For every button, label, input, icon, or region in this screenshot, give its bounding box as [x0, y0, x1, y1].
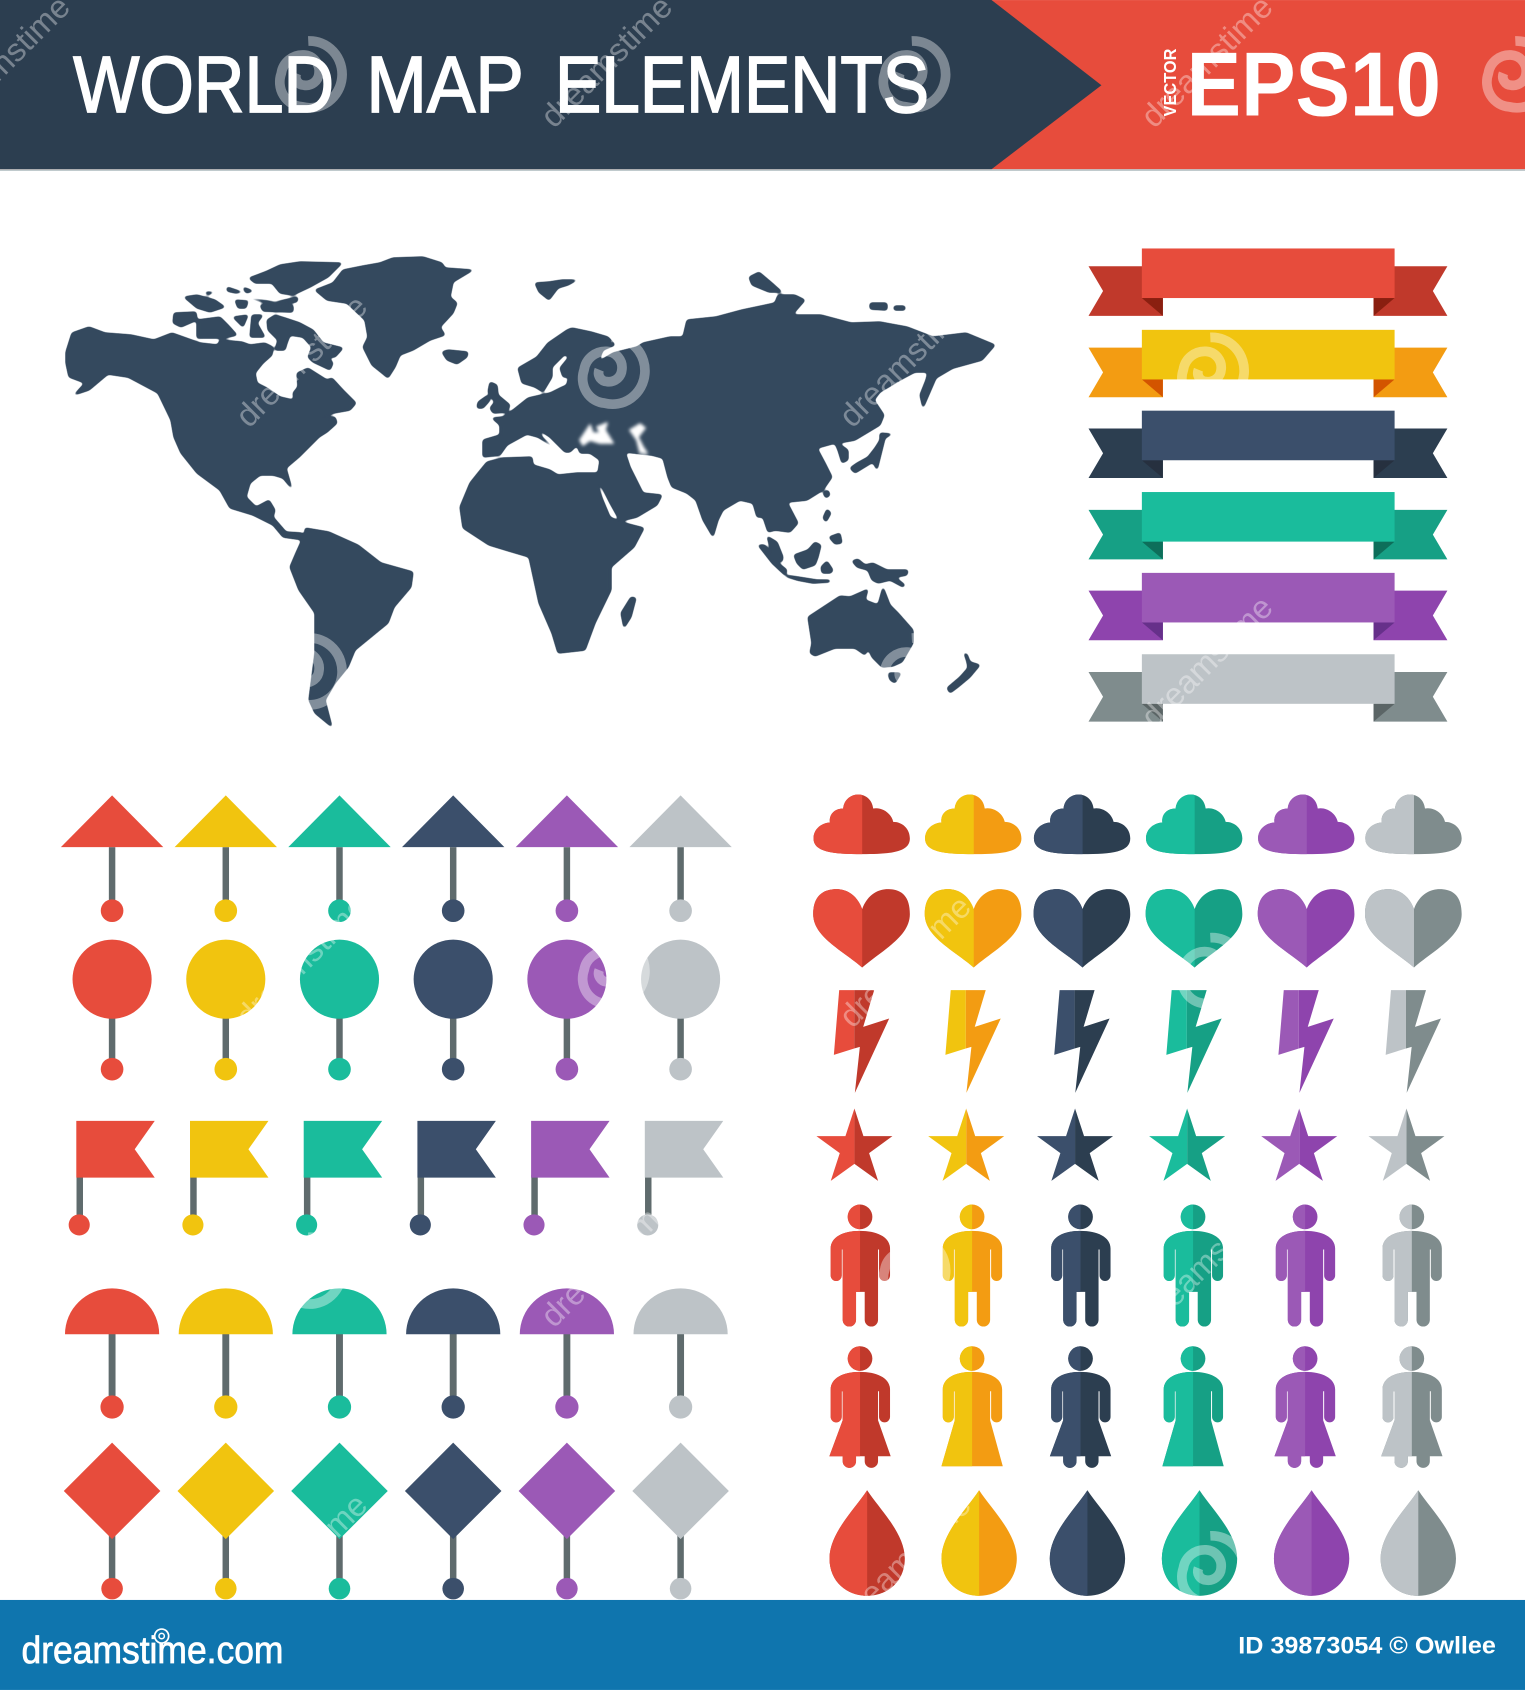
footer bar	[0, 1600, 1525, 1690]
south america	[290, 528, 413, 727]
title	[73, 40, 929, 129]
circle pins	[73, 940, 720, 1080]
ribbons	[1089, 248, 1447, 722]
clouds	[814, 794, 1462, 854]
image id: ID 39873054 © Owllee	[1238, 1633, 1496, 1659]
watermark text: dreamstime	[228, 288, 374, 434]
madagascar	[621, 597, 636, 628]
watermark text: dreamstime	[533, 1188, 679, 1334]
hearts	[813, 889, 1462, 968]
watermark text: dreamstime	[1134, 1188, 1280, 1334]
lightning bolts	[834, 990, 1441, 1093]
ribbon: yellow	[1089, 330, 1447, 397]
ribbon: grey	[1089, 654, 1447, 722]
watermark text: dreamstime	[533, 589, 679, 735]
world map	[66, 257, 995, 727]
south east asia islands	[758, 490, 908, 587]
umbrella pins	[65, 1288, 728, 1419]
water drops	[829, 1490, 1456, 1596]
diamond pins	[64, 1443, 729, 1599]
vector label: VECTOR	[1160, 48, 1180, 116]
watermark text: dreamstime	[832, 1487, 978, 1632]
title: ELEMENTS	[555, 40, 929, 129]
title: WORLD	[73, 40, 334, 129]
watermark text: dreamstime	[228, 888, 374, 1034]
watermark text: dreamstime	[228, 1487, 374, 1632]
eurasia	[483, 295, 995, 537]
footer logo spiral	[155, 1629, 169, 1643]
watermark text: dreamstime	[832, 888, 978, 1034]
title: MAP	[366, 40, 524, 129]
watermark text: dreamstime	[832, 288, 978, 434]
africa	[460, 457, 644, 653]
ribbon: purple	[1089, 573, 1447, 640]
new zealand	[947, 653, 980, 693]
ribbon: navy	[1089, 411, 1447, 478]
australia	[808, 587, 913, 667]
footer logo text: dreamstime.com	[22, 1629, 283, 1671]
tasmania	[888, 673, 901, 683]
male figures	[831, 1205, 1442, 1327]
greenland	[315, 257, 473, 378]
watermark spirals	[280, 41, 1525, 1603]
stars	[816, 1108, 1444, 1181]
arctic islands	[173, 262, 905, 370]
ribbon: red	[1089, 248, 1447, 316]
north america	[66, 327, 356, 540]
flag pins	[69, 1121, 723, 1235]
header banner	[0, 0, 1525, 171]
watermark text: dreamstime	[1134, 589, 1280, 735]
britain and ireland	[477, 382, 510, 413]
japan	[850, 433, 892, 473]
ribbon: teal	[1089, 492, 1447, 559]
inland seas	[580, 423, 647, 453]
eps10 label: EPS10	[1187, 34, 1441, 135]
iceland	[442, 350, 468, 364]
triangle pins	[61, 795, 732, 922]
female figures	[829, 1346, 1443, 1468]
